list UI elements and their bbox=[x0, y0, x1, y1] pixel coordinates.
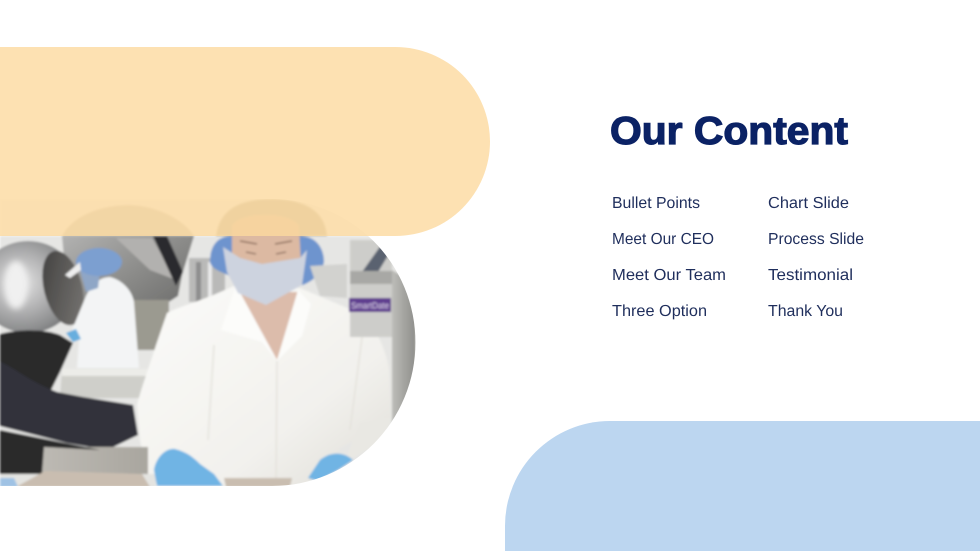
item: Meet Our Team: Meet Our Team bbox=[612, 267, 726, 284]
background steel vats bbox=[0, 205, 225, 392]
photo: factory workers in pill frame bbox=[0, 199, 416, 487]
front work table bbox=[0, 430, 292, 487]
title: Our Content bbox=[610, 110, 848, 153]
orange pill shape bbox=[0, 47, 490, 236]
item: Bullet Points: Bullet Points bbox=[612, 195, 700, 212]
sleeve of visitor bbox=[0, 362, 138, 450]
rear worker bbox=[65, 248, 139, 368]
right side machinery: SmartDate bbox=[351, 300, 389, 310]
main worker coat bbox=[137, 285, 391, 487]
item: Thank You: Thank You bbox=[768, 303, 843, 320]
item: Process Slide: Process Slide bbox=[768, 231, 864, 248]
right side machinery bbox=[309, 240, 416, 422]
content list: right column bbox=[768, 195, 864, 320]
neck bbox=[238, 292, 299, 360]
blue pill shape bbox=[505, 421, 980, 551]
content list: left column bbox=[612, 195, 726, 320]
item: Three Option: Three Option bbox=[612, 303, 707, 320]
item: Meet Our CEO: Meet Our CEO bbox=[612, 231, 714, 248]
rear table bbox=[60, 376, 146, 399]
item: Testimonial: Testimonial bbox=[768, 267, 853, 284]
main worker head bbox=[210, 199, 327, 305]
item: Chart Slide: Chart Slide bbox=[768, 195, 849, 212]
blue gloves bbox=[154, 449, 353, 486]
